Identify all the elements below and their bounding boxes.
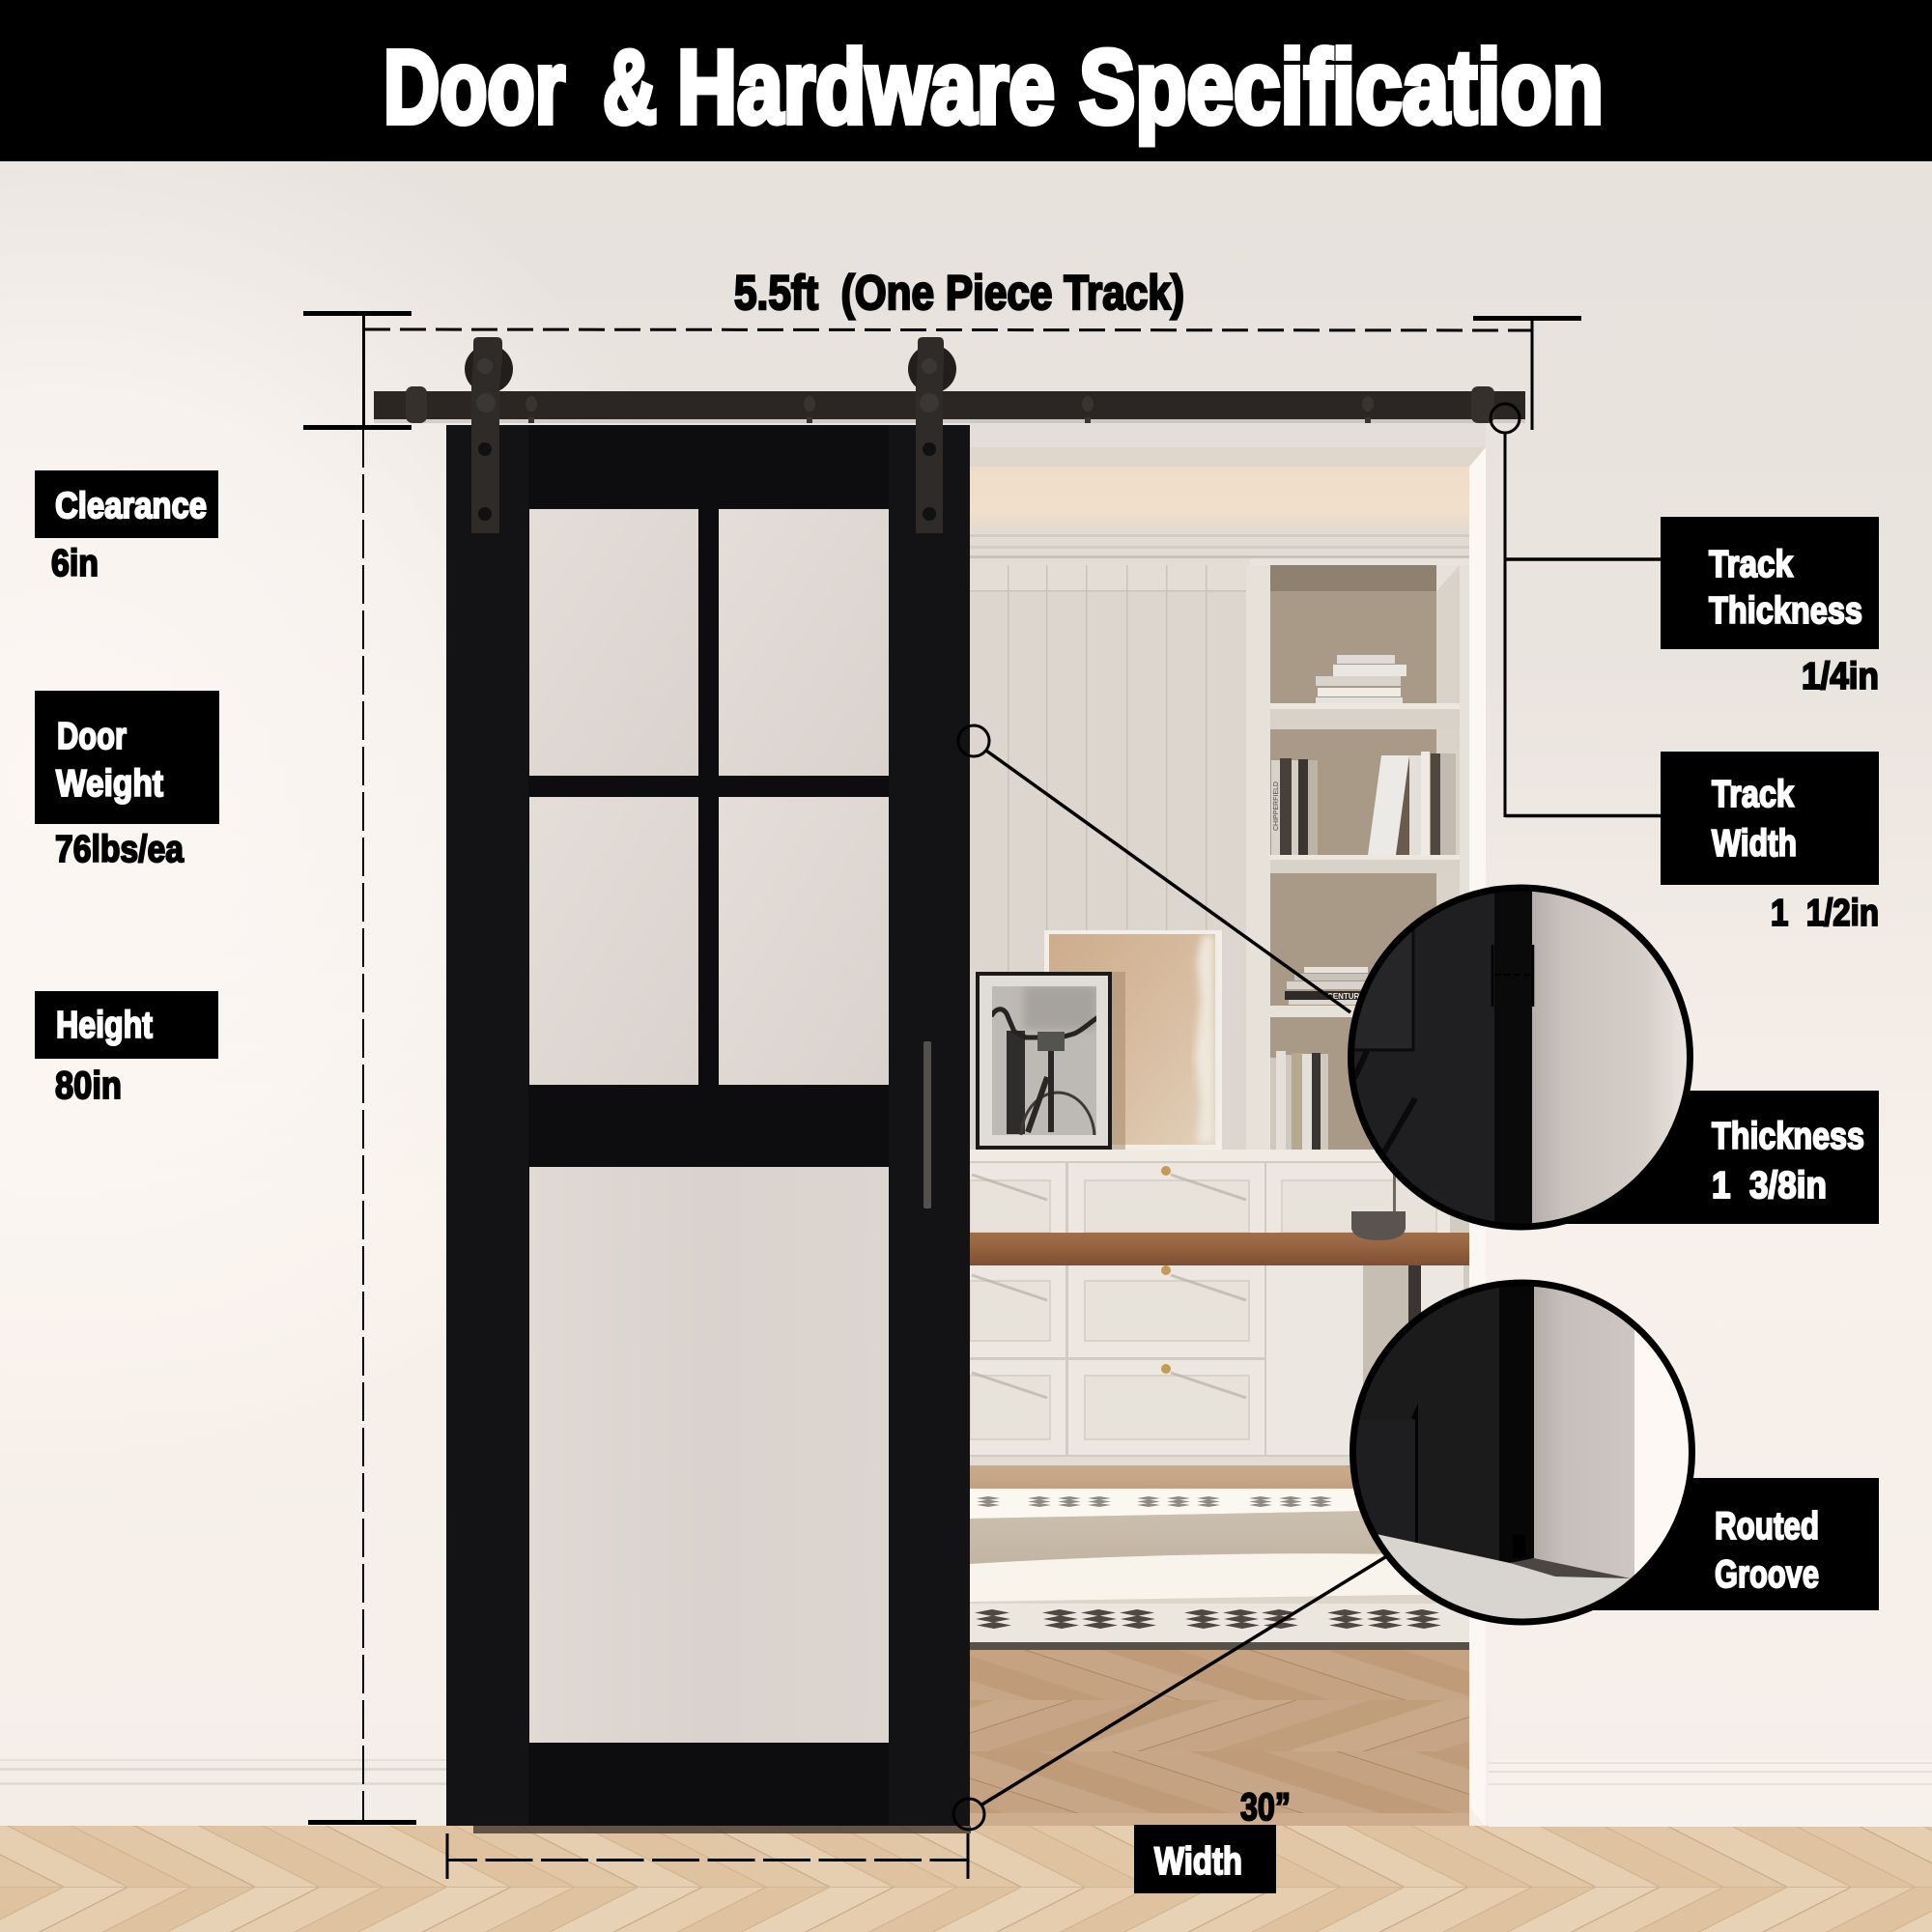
label: thickness: 1 3/8in — [1712, 1165, 1827, 1207]
desk top — [970, 1233, 1469, 1265]
label: door weight: Door — [57, 716, 127, 757]
glass pane middle left — [529, 797, 698, 1085]
handle — [923, 1041, 931, 1208]
books: fourth shelf — [1270, 1051, 1328, 1150]
label: clearance: 6in — [51, 543, 99, 584]
track length dimension — [303, 266, 1581, 430]
label: track thickness — [1661, 517, 1879, 697]
label: door weight — [35, 691, 219, 870]
leader: routed groove callout — [953, 1557, 1385, 1830]
label: width: Width — [1154, 1840, 1242, 1883]
label: height: 80in — [55, 1065, 122, 1107]
books: second shelf: CHIPPERFIELD — [1273, 781, 1280, 831]
bookshelf — [1246, 565, 1469, 1161]
label: track width: 1 1/2in — [1771, 893, 1879, 934]
zoom circle: door thickness — [1347, 885, 1694, 1231]
height dimension — [308, 429, 416, 1825]
label: width — [1134, 1786, 1291, 1893]
ceiling and cove light — [970, 447, 1486, 526]
label: door weight: 76lbs/ea — [55, 829, 184, 870]
title: Door — [384, 28, 565, 145]
label: routed groove: Groove — [1715, 1553, 1819, 1596]
hanger left — [465, 337, 513, 533]
glass pane upper left — [529, 509, 698, 776]
floor and rug in the far room — [970, 1465, 1469, 1826]
label: thickness — [1546, 1091, 1879, 1224]
label: width: 30” — [1240, 1786, 1291, 1829]
glass pane middle right — [719, 797, 889, 1085]
track — [374, 386, 1525, 423]
label: clearance: Clearance — [55, 486, 207, 526]
leaning watercolour print — [1044, 930, 1222, 1150]
leader: thickness callout — [958, 725, 1350, 1012]
label: track thickness: Track — [1709, 544, 1793, 585]
rails — [528, 425, 889, 1826]
books: second shelf — [1271, 752, 1456, 855]
label: clearance — [35, 470, 218, 584]
label: routed groove — [1546, 1478, 1879, 1610]
title: Hardware — [677, 28, 1055, 145]
track marker and leader lines — [1491, 404, 1661, 817]
width dimension — [446, 1833, 970, 1879]
framed bicycle photo — [976, 972, 1112, 1150]
label: height: Height — [56, 1005, 153, 1046]
zoom circle: routed groove — [1350, 1279, 1700, 1633]
books: top shelf stack — [1316, 655, 1406, 703]
title — [384, 28, 1604, 145]
label: routed groove: Routed — [1715, 1505, 1819, 1548]
title: & — [603, 28, 657, 145]
label: height — [35, 991, 218, 1107]
hanger right — [908, 337, 956, 533]
title: Specification — [1079, 28, 1604, 145]
label: track thickness: Thickness — [1709, 590, 1862, 632]
cabinets — [970, 1150, 1469, 1465]
label: thickness: Thickness — [1712, 1116, 1864, 1157]
track stoppers — [406, 386, 1494, 423]
books: third shelf stack: CENTURY — [1327, 992, 1365, 1001]
bowl and lamp — [1351, 1150, 1406, 1240]
label: track width: Track — [1712, 774, 1794, 815]
glass pane upper right — [719, 509, 889, 776]
track length dimension: 5.5ft (One Piece Track) — [734, 266, 1184, 320]
wood floor in the far room — [970, 1650, 1469, 1826]
rug diamonds, bottom band — [975, 1609, 1441, 1629]
door frame reveal — [1469, 447, 1486, 1827]
crown moulding — [970, 526, 1469, 558]
label: track width — [1661, 752, 1879, 934]
rug diamonds, top band — [977, 1496, 1332, 1507]
label: door weight: Weight — [56, 763, 163, 805]
track bolts — [526, 396, 1374, 423]
books: third shelf stack — [1285, 967, 1368, 1005]
label: track width: Width — [1712, 823, 1797, 865]
baseboards — [0, 1757, 1932, 1827]
panelled wall — [970, 558, 1250, 1161]
glass pane lower — [529, 1167, 889, 1743]
label: track thickness: 1/4in — [1802, 656, 1879, 697]
header bar — [0, 0, 1932, 161]
floor — [0, 1826, 1932, 1932]
barn door — [446, 425, 970, 1826]
